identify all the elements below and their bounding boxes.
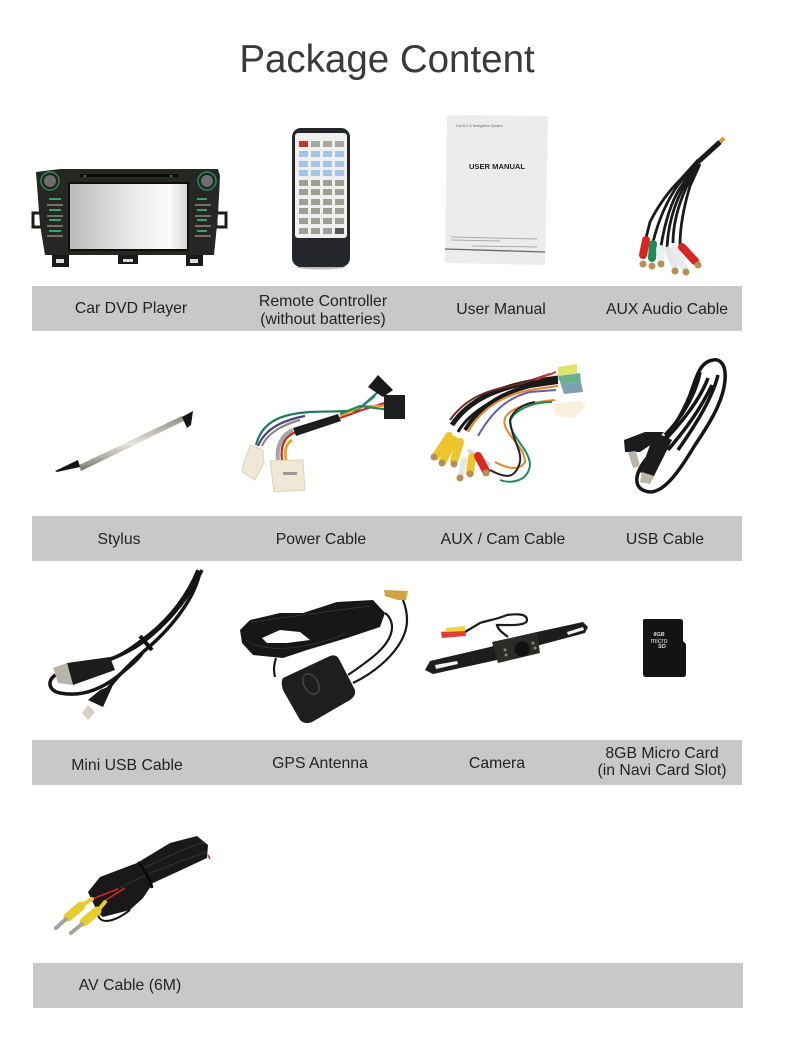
caption: AUX / Cam Cable: AUX / Cam Cable — [441, 531, 566, 548]
caption: USB Cable: USB Cable — [626, 531, 704, 548]
caption bar: row 1 — [32, 286, 742, 331]
icon: power cable — [242, 375, 405, 492]
icon: user manual: Car A.V & Navigation System — [456, 124, 503, 128]
caption: AUX Audio Cable: AUX Audio Cable — [606, 301, 728, 318]
caption: Camera: Camera — [469, 755, 525, 772]
icon: AUX audio cable — [640, 138, 724, 276]
caption: User Manual: User Manual — [456, 301, 546, 318]
caption: 8GB Micro Card: 8GB Micro Card — [605, 745, 719, 762]
icon: 8GB micro SD card: SD — [658, 644, 666, 650]
icon: USB cable — [624, 360, 725, 492]
caption: Car DVD Player: Car DVD Player — [75, 300, 187, 317]
icon: mini USB cable — [50, 570, 202, 720]
caption: GPS Antenna: GPS Antenna — [272, 755, 368, 772]
caption bar: row 4 — [33, 963, 743, 1008]
icon: user manual: USER MANUAL — [469, 162, 525, 171]
icon: car DVD player — [33, 169, 226, 267]
icon: AV cable — [56, 836, 210, 933]
caption: Remote Controller: (without batteries) — [260, 311, 386, 328]
icon: 8GB micro SD card — [643, 619, 686, 677]
caption: Stylus: Stylus — [97, 531, 141, 548]
caption: Mini USB Cable: Mini USB Cable — [71, 757, 183, 774]
title: Package Content — [239, 38, 535, 81]
icon: AUX / Cam cable — [430, 364, 586, 482]
caption: AV Cable (6M): AV Cable (6M) — [79, 977, 181, 994]
caption bar: row 3 — [32, 740, 742, 785]
icon: rear camera — [425, 614, 588, 674]
caption: Power Cable: Power Cable — [276, 531, 366, 548]
icon: 8GB micro SD card: micro — [650, 638, 668, 645]
icon: 8GB micro SD card: 8GB — [653, 632, 665, 638]
icon: user manual — [445, 115, 548, 265]
caption: 8GB Micro Card: (in Navi Card Slot) — [597, 762, 727, 779]
caption bar: row 2 — [32, 516, 742, 561]
caption: Remote Controller: Remote Controller — [259, 293, 387, 310]
icon: stylus — [55, 411, 193, 472]
icon: GPS antenna — [240, 590, 408, 723]
icon: remote controller — [292, 128, 350, 270]
